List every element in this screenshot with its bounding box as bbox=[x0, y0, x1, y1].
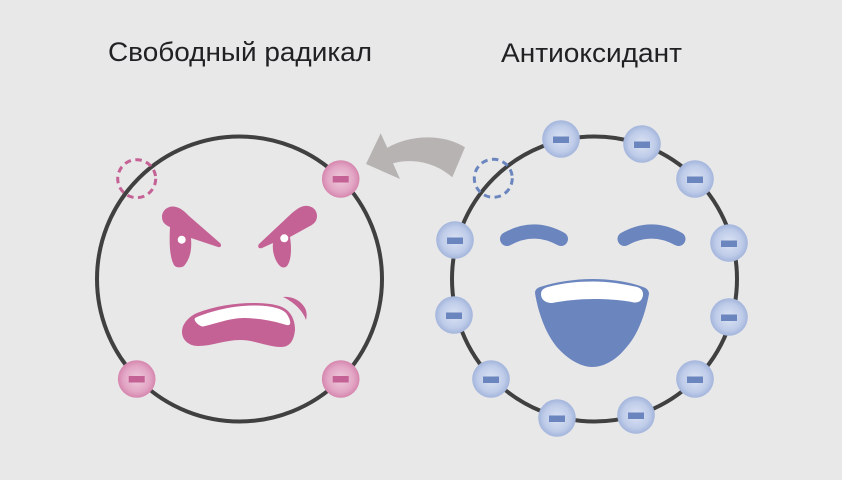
angry right eye bbox=[258, 206, 317, 268]
antioxidant figure bbox=[435, 120, 748, 437]
ring: antioxidant bbox=[452, 136, 737, 422]
free radical figure bbox=[97, 136, 382, 422]
happy right eye bbox=[624, 232, 678, 239]
angry mouth bbox=[182, 297, 307, 347]
ring: free radical bbox=[97, 136, 382, 422]
title: antioxidant: Антиоксидант bbox=[501, 38, 682, 68]
missing electron dashed circle bbox=[118, 160, 156, 198]
title: free radical: Свободный радикал bbox=[108, 37, 372, 67]
electron bottom right bbox=[322, 360, 360, 398]
electrons bbox=[435, 120, 748, 437]
donated electron dashed circle bbox=[474, 159, 512, 197]
electron bottom left bbox=[118, 360, 156, 398]
arrow: electron transfer bbox=[366, 133, 465, 179]
happy mouth bbox=[535, 279, 649, 367]
electron top right bbox=[322, 160, 360, 198]
angry left eye bbox=[162, 206, 221, 267]
happy left eye bbox=[507, 232, 561, 239]
